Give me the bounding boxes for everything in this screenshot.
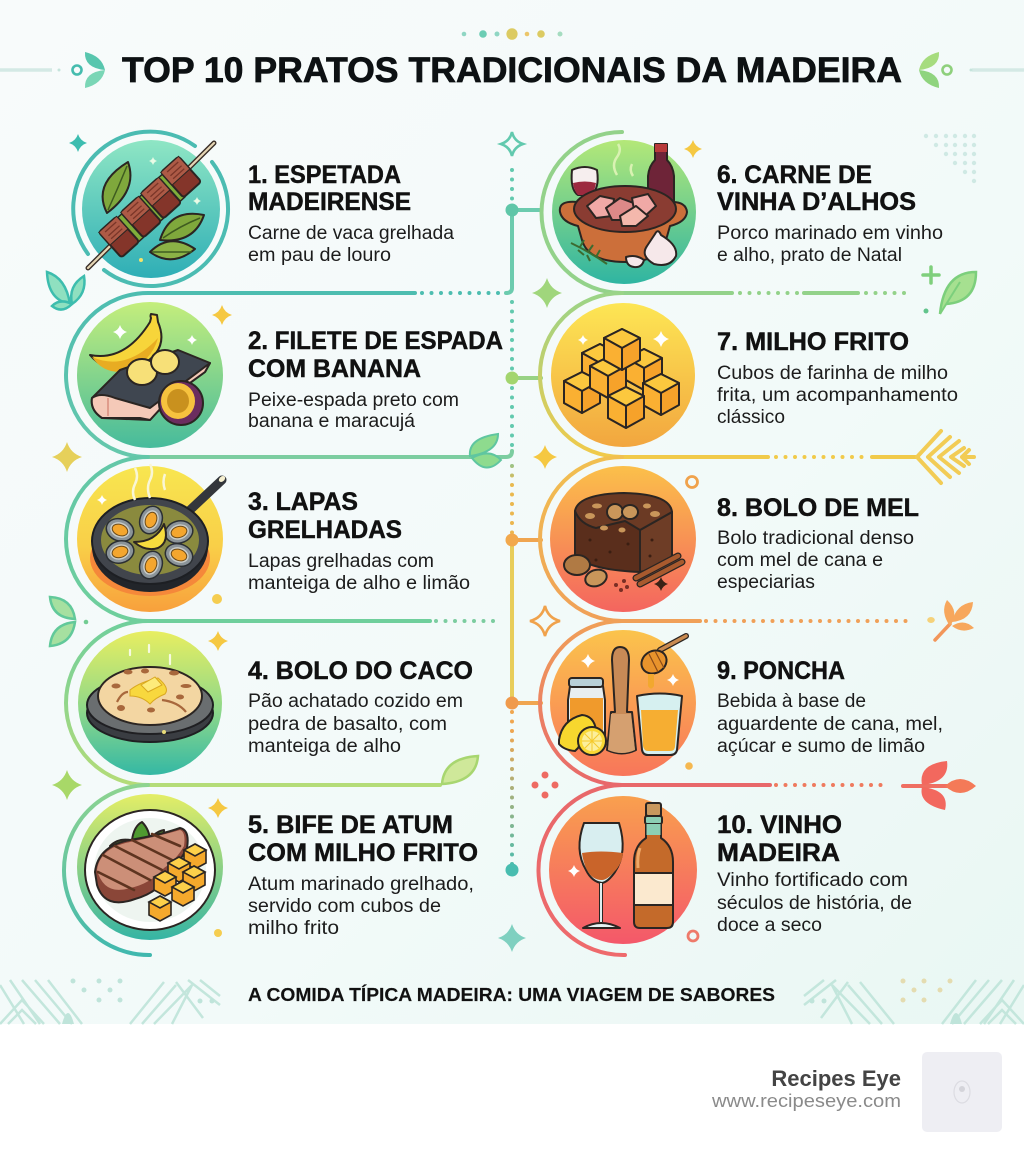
circle background [551, 303, 695, 447]
icon: poncha ingredients [559, 636, 686, 755]
description: banana e maracujá [248, 411, 415, 432]
description: açúcar e sumo de limão [717, 736, 925, 757]
connector: central timeline [422, 170, 541, 876]
panel: dish 8 [550, 466, 919, 612]
description: manteiga de alho [248, 736, 401, 757]
heading: 8. BOLO DE MEL [717, 494, 919, 522]
icon: filete with banana [90, 314, 210, 425]
brand name: Recipes Eye [771, 1066, 901, 1091]
circle background [77, 302, 223, 448]
heading [248, 488, 402, 544]
icon: tuna steak plate [85, 810, 215, 930]
description: Lapas grelhadas com [248, 551, 434, 572]
circle background [552, 140, 696, 284]
description [717, 223, 943, 266]
description: Porco marinado em vinho [717, 223, 943, 244]
heading: 2. FILETE DE ESPADA [248, 327, 503, 355]
panel: dish 6 [552, 140, 943, 284]
description: manteiga de alho e limão [248, 573, 470, 594]
heading: 5. BIFE DE ATUM [248, 811, 453, 839]
description [717, 363, 958, 428]
heading: 4. BOLO DO CACO [248, 657, 473, 685]
brand url: www.recipeseye.com [711, 1091, 901, 1111]
description: Atum marinado grelhado, [248, 874, 474, 895]
heading: MADEIRENSE [248, 188, 411, 216]
description: Bolo tradicional denso [717, 528, 914, 549]
footer pattern: right [804, 978, 1024, 1024]
description [248, 691, 463, 757]
description [248, 390, 459, 432]
decoration: sparkles [52, 132, 939, 952]
panel: dish 10 [549, 796, 912, 944]
description: com mel de cana e [717, 550, 883, 571]
footer pattern: left [0, 978, 220, 1024]
description: Vinho fortificado com [717, 870, 908, 891]
panel: dish 5 [77, 794, 478, 940]
heading [717, 811, 842, 867]
heading [248, 327, 503, 383]
description: doce a seco [717, 915, 822, 936]
heading: COM MILHO FRITO [248, 839, 478, 867]
circle background [77, 794, 223, 940]
description: aguardente de cana, mel, [717, 714, 943, 735]
description: séculos de história, de [717, 893, 912, 914]
panel: dish 2 [77, 302, 503, 448]
description: pedra de basalto, com [248, 714, 447, 735]
decoration: leaves [47, 272, 976, 810]
circle background [550, 466, 696, 612]
heading: 10. VINHO [717, 811, 842, 839]
description [717, 528, 914, 593]
decoration: title ornament right [919, 52, 1024, 88]
heading: 6. CARNE DE [717, 161, 872, 189]
description: Carne de vaca grelhada [248, 223, 454, 244]
description [248, 874, 474, 939]
description: milho frito [248, 918, 339, 939]
circle background [77, 466, 223, 612]
description: especiarias [717, 572, 815, 593]
icon: skewer [88, 143, 214, 268]
circle background [550, 630, 696, 776]
description [717, 870, 912, 936]
heading: 3. LAPAS [248, 488, 358, 516]
icon: honey cake [564, 493, 682, 592]
footer tagline: A COMIDA TÍPICA MADEIRA: UMA VIAGEM DE SABORES [248, 984, 775, 1005]
icon: bolo do caco on stone [87, 645, 213, 742]
heading [717, 161, 916, 216]
description: Bebida à base de [717, 691, 866, 712]
heading: COM BANANA [248, 355, 421, 383]
description: servido com cubos de [248, 896, 441, 917]
description: Pão achatado cozido em [248, 691, 463, 712]
decoration: dot grid top right [924, 134, 976, 183]
decoration: top dots [462, 28, 562, 40]
heading: 9. PONCHA [717, 657, 845, 685]
description: em pau de louro [248, 245, 391, 266]
description [248, 551, 470, 594]
heading: MADEIRA [717, 839, 840, 867]
brand footer [711, 1052, 1002, 1132]
logo placeholder [922, 1052, 1002, 1132]
description: frita, um acompanhamento [717, 385, 958, 406]
connector: right column curves [538, 132, 950, 955]
connector: left column curves [64, 132, 512, 955]
description: e alho, prato de Natal [717, 245, 902, 266]
panel: dish 7 [551, 303, 958, 447]
icon: clay pot with wine and garlic [560, 144, 687, 267]
arrow: golden feather [917, 431, 974, 483]
heading: VINHA D’ALHOS [717, 188, 916, 216]
panel: dish 4 [78, 631, 473, 775]
decoration: title ornament left [0, 52, 105, 88]
description: clássico [717, 407, 785, 428]
circle background [78, 631, 222, 775]
heading [248, 161, 411, 216]
heading: 7. MILHO FRITO [717, 328, 909, 356]
circle background [82, 140, 220, 278]
title: TOP 10 PRATOS TRADICIONAIS DA MADEIRA [122, 51, 902, 90]
panel: dish 3 [77, 464, 470, 612]
circle background [549, 796, 697, 944]
icon: wine glass and bottle [568, 803, 673, 928]
heading: 1. ESPETADA [248, 161, 401, 189]
heading [248, 811, 478, 867]
icon: fried corn cubes [564, 329, 679, 428]
heading: GRELHADAS [248, 516, 402, 544]
panel: dish 1 [82, 140, 454, 278]
icon: pan of limpets [90, 464, 226, 596]
description: Peixe-espada preto com [248, 390, 459, 411]
description [717, 691, 943, 757]
panel: dish 9 [550, 630, 943, 776]
description: Cubos de farinha de milho [717, 363, 948, 384]
description [248, 223, 454, 266]
